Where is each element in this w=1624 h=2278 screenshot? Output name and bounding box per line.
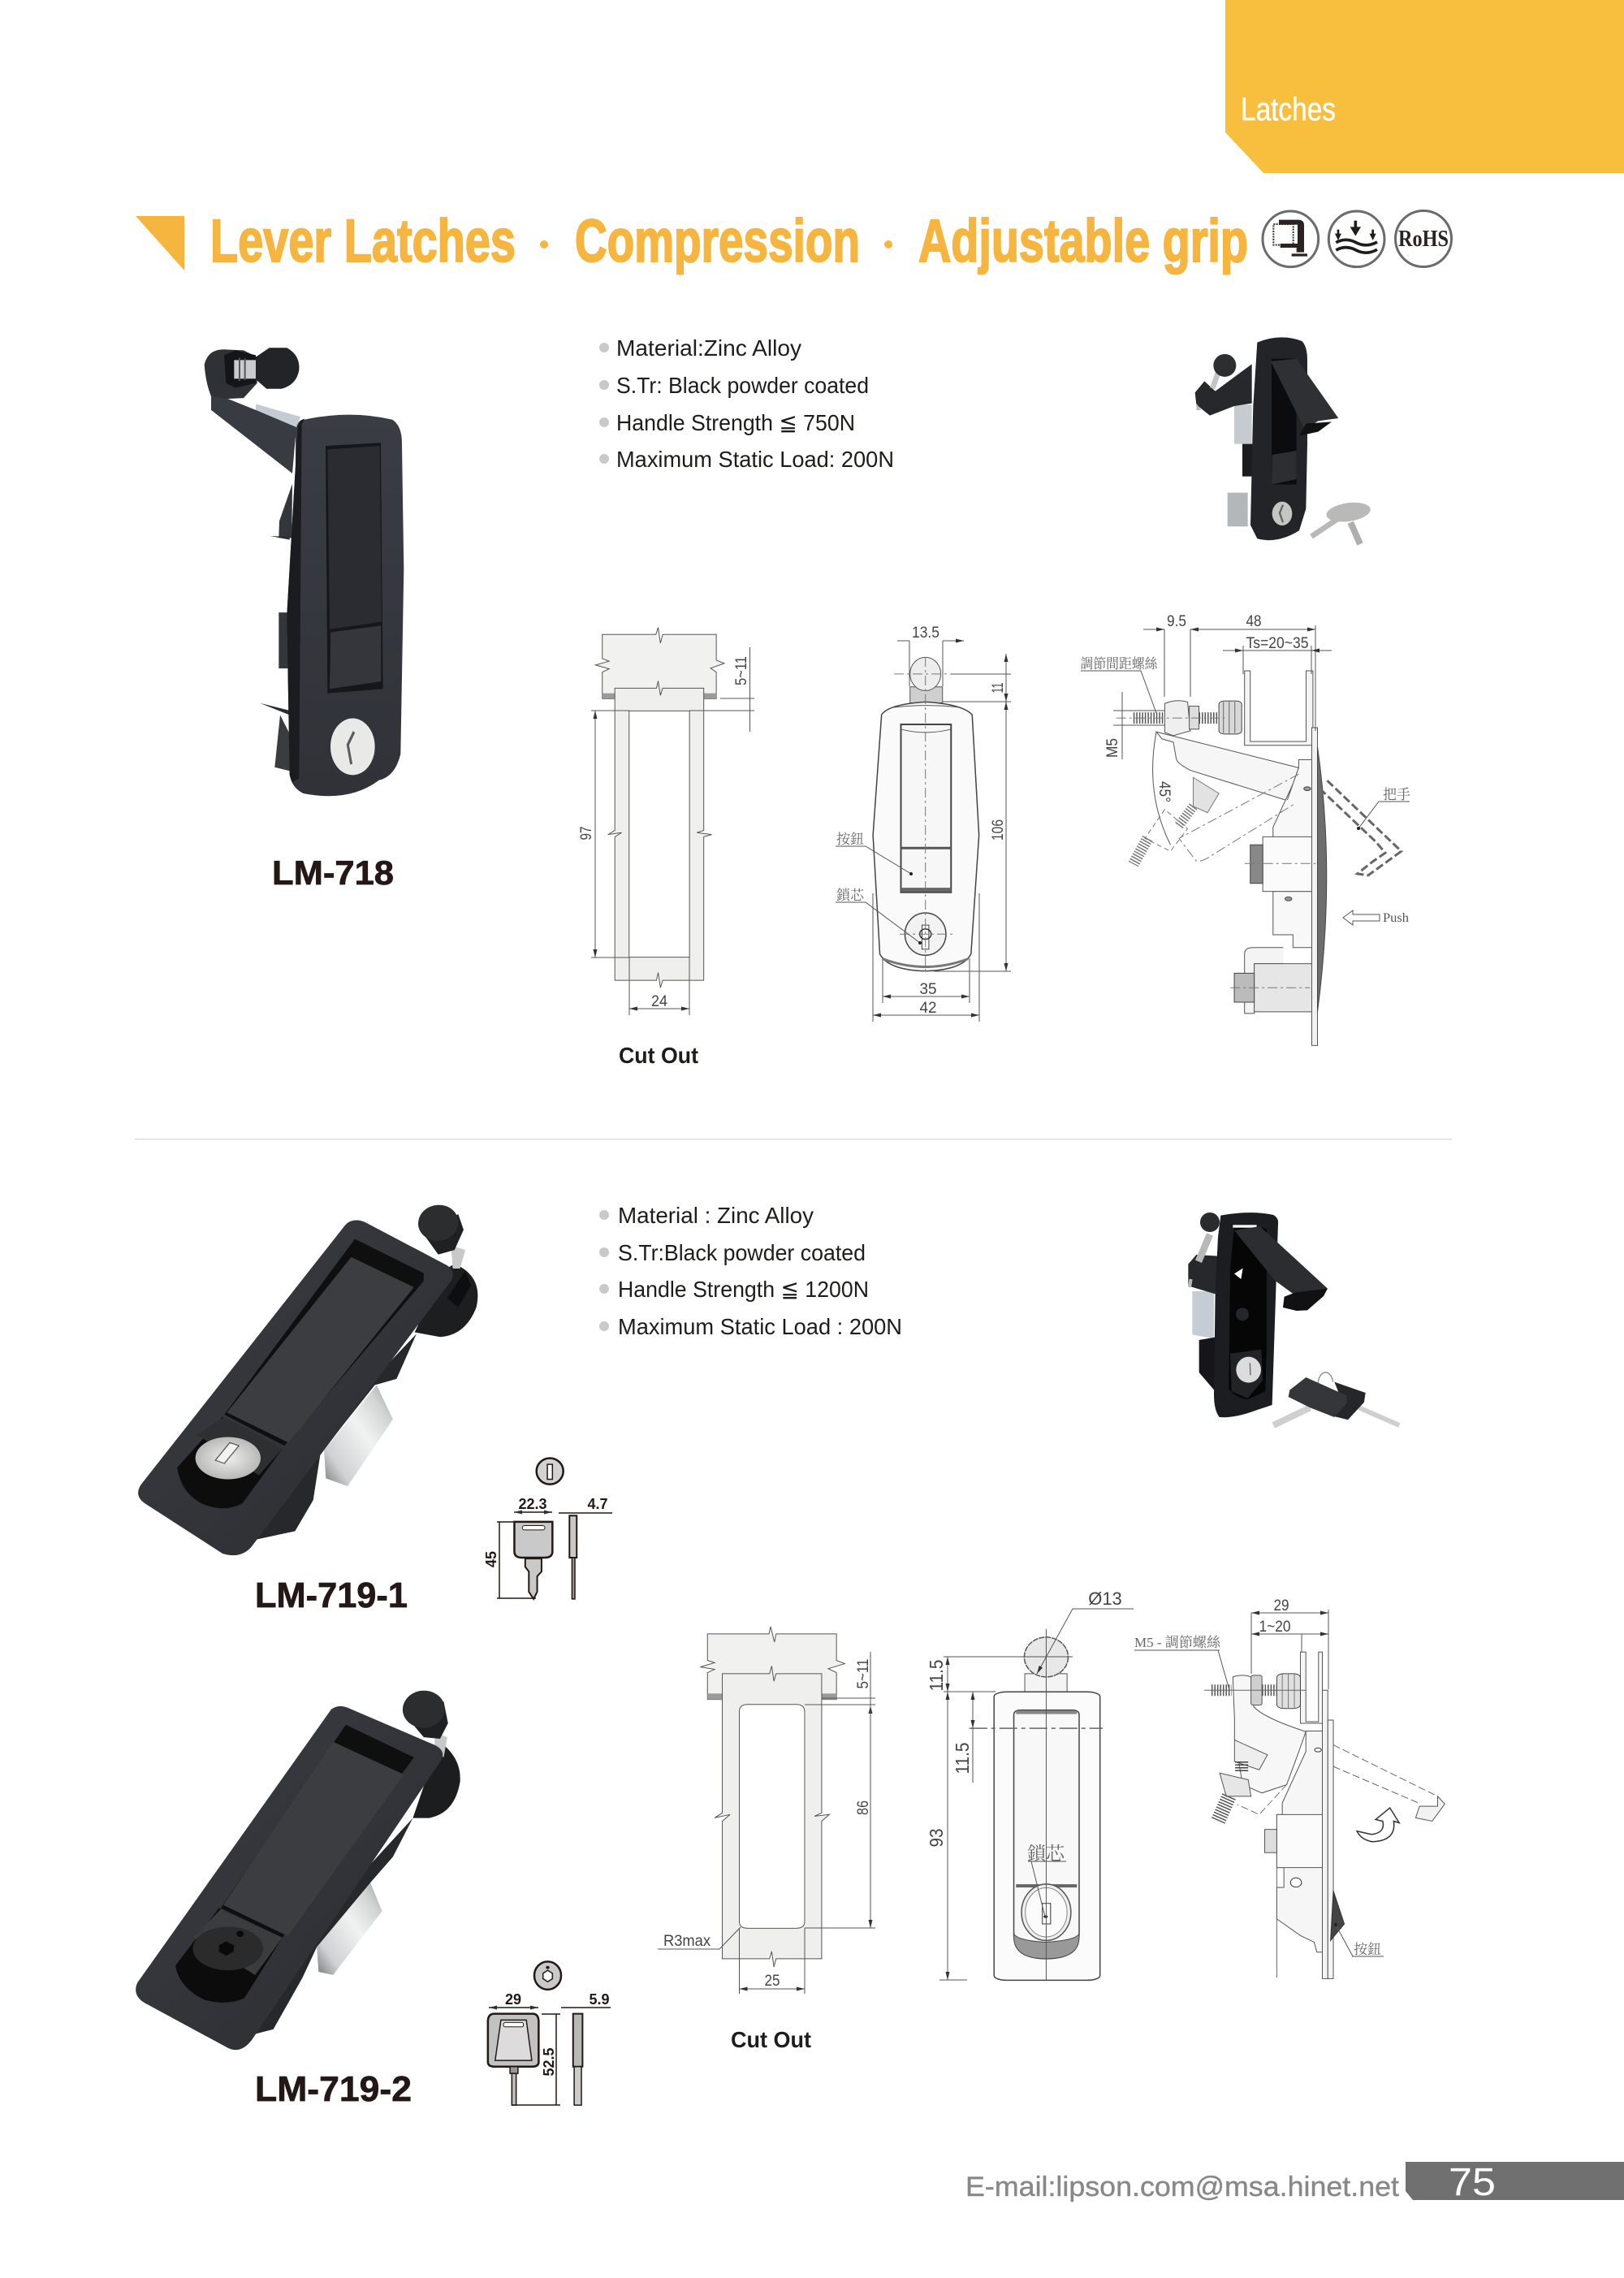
footer: page number bar: 75	[1449, 2161, 1496, 2204]
diagram: LM-719 front view	[926, 1589, 1134, 1980]
dimension: 13.5	[897, 625, 964, 686]
key diagram: LM-719-1	[483, 1458, 612, 1599]
dimension: 52.5: 52.5	[541, 2047, 557, 2077]
dimension: 86: 86	[855, 1800, 872, 1815]
spec list: LM-719: Material : Zinc Alloy	[618, 1203, 814, 1228]
diagram: LM-718 front view	[836, 625, 1011, 1022]
callout: 鎖芯: 鎖芯	[1027, 1844, 1065, 1864]
icon: RoHS	[1395, 211, 1452, 266]
photo: LM-718 latch	[205, 348, 404, 796]
caption: Cut Out: Cut Out	[619, 1043, 698, 1068]
header tab: Latches: Latches	[1241, 92, 1336, 128]
dimension: 97	[578, 711, 629, 957]
title: Lever Latches, Compression, Adjustable grip: Lever Latches	[210, 207, 516, 274]
dimension: 5~11: 5~11	[855, 1658, 872, 1689]
dimension: 11.5 lower: 11.5	[952, 1743, 973, 1774]
dimension: 29	[489, 1991, 538, 2008]
callout: 調節間距螺絲: 調節間距螺絲	[1080, 656, 1158, 672]
diagram: LM-718 cut out	[578, 628, 754, 1015]
product label: LM-719-1: LM-719-1	[255, 1576, 408, 1615]
dimension: 5~11	[689, 647, 754, 732]
header tab: Latches	[1225, 0, 1624, 173]
dimension: 45	[483, 1522, 536, 1598]
dimension: 5.9: 5.9	[589, 1991, 610, 2008]
spec list: LM-718: Handle Strength ≦ 750N	[616, 410, 855, 435]
callout: R3max	[658, 1927, 741, 1950]
dimension: 29: 29	[505, 1991, 521, 2008]
callout: 鎖芯: 鎖芯	[836, 888, 865, 903]
dimension: diameter 13	[1037, 1589, 1134, 1674]
dimension: M5	[1104, 692, 1164, 759]
arrow: Push	[1343, 910, 1409, 925]
dimension: 9.5	[1143, 613, 1190, 697]
callout: 調節間距螺絲	[1080, 656, 1158, 713]
photo: LM-719 open latch with keys	[1188, 1212, 1399, 1425]
callout: 鎖芯	[1027, 1844, 1066, 1917]
dimension: 5.9	[561, 1991, 611, 2008]
panel: LM-718	[205, 335, 1410, 1068]
dimension: 29	[1251, 1597, 1328, 1689]
dimension: 24	[629, 957, 689, 1015]
dimension: 11	[943, 654, 1011, 702]
caption: Cut Out: Cut Out	[731, 2027, 811, 2052]
dimension: 11.5 upper: 11.5	[926, 1660, 947, 1691]
spec list: LM-718: Maximum Static Load: 200N	[616, 447, 894, 472]
callout: M5 adjusting screw	[1134, 1635, 1229, 1690]
dimension: 5~11	[822, 1652, 875, 1715]
dimension: 93: 93	[926, 1829, 947, 1847]
spec list: LM-718: Material:Zinc Alloy	[616, 335, 801, 361]
diagram: LM-718 side view	[1080, 613, 1410, 1045]
dimension: 45 degrees: 45°	[1155, 781, 1173, 802]
dimension: 24: 24	[651, 993, 667, 1010]
dimension: diameter 13: Ø13	[1088, 1589, 1122, 1609]
icon: clamp	[1263, 211, 1319, 267]
dimension: 45: 45	[483, 1551, 499, 1567]
callout: 按鈕	[836, 832, 913, 875]
divider	[135, 1139, 1452, 1140]
dimension: 106: 106	[990, 819, 1007, 841]
photo: LM-719-1 latch	[138, 1200, 477, 1555]
arrow: Push: Push	[1383, 911, 1409, 925]
dimension: 9.5: 9.5	[1167, 613, 1186, 630]
callout: 按鈕	[1334, 1923, 1384, 1957]
callout: 按鈕: 按鈕	[836, 832, 864, 847]
dimension: 1~20: 1~20	[1259, 1619, 1291, 1636]
footer: contact email: E-mail:lipson.com@msa.hinet.net	[965, 2172, 1400, 2202]
diagram: LM-719 cut out	[658, 1627, 875, 1994]
dimension: M5: M5	[1104, 738, 1121, 758]
dimension: 25: 25	[765, 1973, 780, 1990]
product label: LM-719-2: LM-719-2	[255, 2069, 412, 2109]
dimension: 11.5 lower	[952, 1692, 973, 1783]
dimension: 5~11: 5~11	[733, 656, 750, 685]
icon: RoHS: RoHS	[1398, 227, 1449, 252]
callout: 鎖芯	[836, 888, 922, 944]
product label: LM-718: LM-718	[272, 854, 394, 892]
dimension: 42: 42	[919, 1000, 937, 1017]
diagram: LM-719 side view	[1134, 1597, 1445, 1978]
icon group: certification badges	[1263, 211, 1452, 267]
dimension: 29: 29	[1273, 1597, 1289, 1614]
spec list: LM-719	[599, 1203, 902, 1339]
dimension: 22.3: 22.3	[518, 1496, 547, 1512]
spec list: LM-719: Handle Strength ≦ 1200N	[618, 1277, 869, 1302]
dimension: 4.7	[559, 1496, 612, 1513]
callout: 把手	[1357, 787, 1410, 830]
key diagram: LM-719-2	[488, 1961, 611, 2105]
callout: R3max: R3max	[663, 1933, 710, 1950]
dimension: 4.7: 4.7	[587, 1496, 608, 1512]
dimension: Ts=20~35	[1223, 635, 1332, 674]
footer: page number bar	[1406, 2161, 1624, 2204]
dimension: 11.5 upper	[926, 1657, 1073, 1692]
dimension: 1~20	[1251, 1619, 1328, 1652]
photo: LM-719-2 latch	[136, 1687, 460, 2050]
title: Lever Latches, Compression, Adjustable grip: Adjustable grip	[918, 207, 1248, 274]
panel: LM-719	[136, 1200, 1445, 2109]
dimension: 52.5	[512, 2014, 560, 2105]
spec list: LM-719: Maximum Static Load : 200N	[618, 1314, 902, 1339]
callout: 把手: 把手	[1383, 787, 1410, 802]
dimension: 42	[873, 893, 979, 1022]
callout: 按鈕: 按鈕	[1354, 1942, 1381, 1957]
callout: M5 adjusting screw: M5 - 調節螺絲	[1134, 1635, 1221, 1650]
spec list: LM-718: S.Tr: Black powder coated	[616, 373, 869, 398]
dimension: 97: 97	[578, 827, 595, 840]
dimension: 48: 48	[1246, 613, 1262, 630]
title: Lever Latches, Compression, Adjustable grip: Compression	[575, 207, 860, 274]
dimension: 35	[883, 958, 970, 1003]
dimension: 86	[805, 1705, 875, 1928]
dimension: Ts=20~35: Ts=20~35	[1246, 635, 1309, 652]
dimension: 11: 11	[990, 683, 1007, 693]
dimension: 13.5: 13.5	[912, 625, 939, 642]
spec list: LM-718	[599, 335, 894, 472]
dimension: 25	[739, 1928, 805, 1994]
icon: water	[1328, 211, 1384, 267]
spec list: LM-719: S.Tr:Black powder coated	[618, 1240, 866, 1265]
title: Lever Latches, Compression, Adjustable grip	[136, 207, 1248, 274]
photo: LM-718 open latch with keys	[1195, 337, 1371, 544]
dimension: 35: 35	[919, 981, 937, 998]
